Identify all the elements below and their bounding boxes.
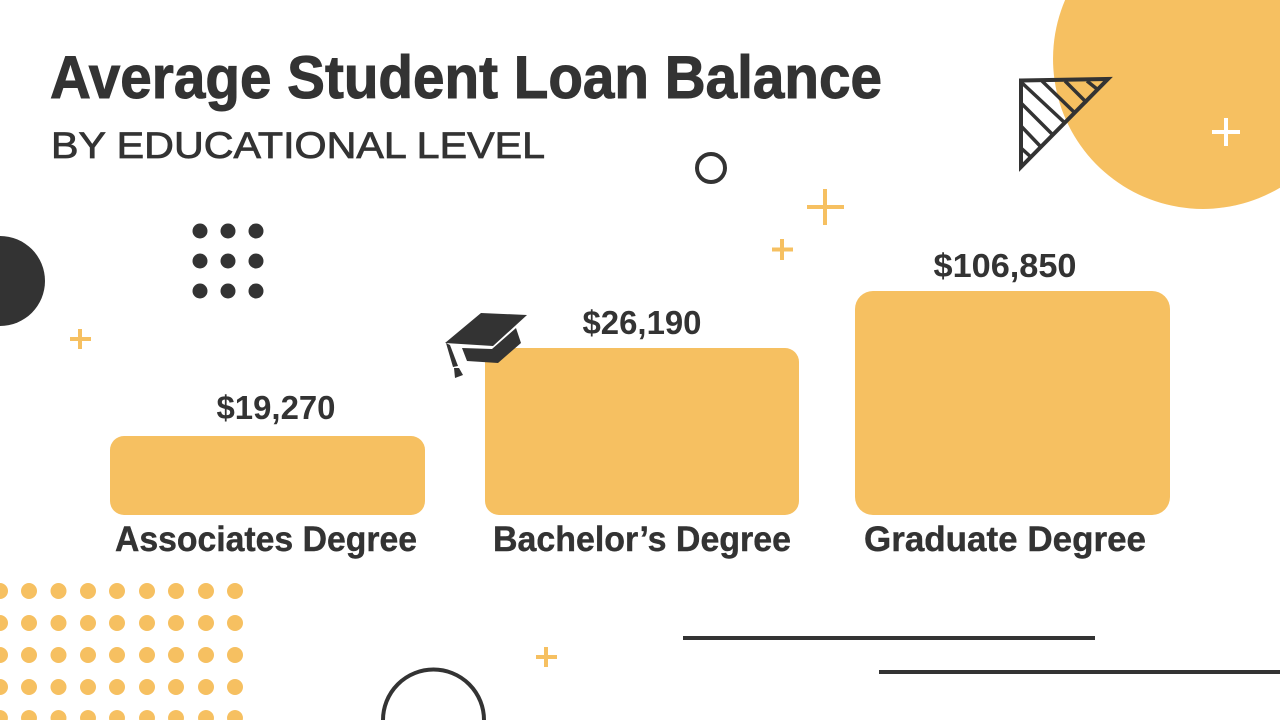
label: associates: Associates Degree [115, 520, 417, 559]
decoration: yellow dot grid [0, 583, 243, 720]
decoration: yellow plus left [70, 329, 91, 349]
decoration: yellow plus bottom [536, 647, 557, 667]
icon: white plus on circle [1212, 118, 1240, 146]
value: bachelor's: $26,190 [582, 304, 702, 341]
decoration: small ring [697, 154, 725, 182]
decoration: line one [683, 636, 1095, 640]
decoration: striped triangle [1021, 79, 1108, 167]
decoration: yellow plus small [772, 239, 793, 260]
label: bachelor's: Bachelor’s Degree [493, 520, 791, 559]
decoration: line two [879, 670, 1280, 674]
bar: associates degree [110, 436, 425, 515]
subtitle: BY EDUCATIONAL LEVEL [51, 125, 545, 166]
decoration: yellow plus large [807, 189, 844, 225]
value: graduate: $106,850 [934, 247, 1076, 284]
value: associates: $19,270 [216, 389, 336, 426]
decoration: large yellow circle top right [1053, 0, 1280, 209]
decoration: dark half circle left [0, 236, 45, 326]
decoration: dark dot grid [192, 224, 264, 298]
bar: bachelor's degree [485, 348, 799, 515]
bar: graduate degree [855, 291, 1170, 515]
title: Average Student Loan Balance [50, 44, 882, 111]
icon: graduation cap [445, 313, 527, 378]
label: graduate: Graduate Degree [864, 520, 1146, 559]
decoration: bottom ring [383, 670, 484, 720]
